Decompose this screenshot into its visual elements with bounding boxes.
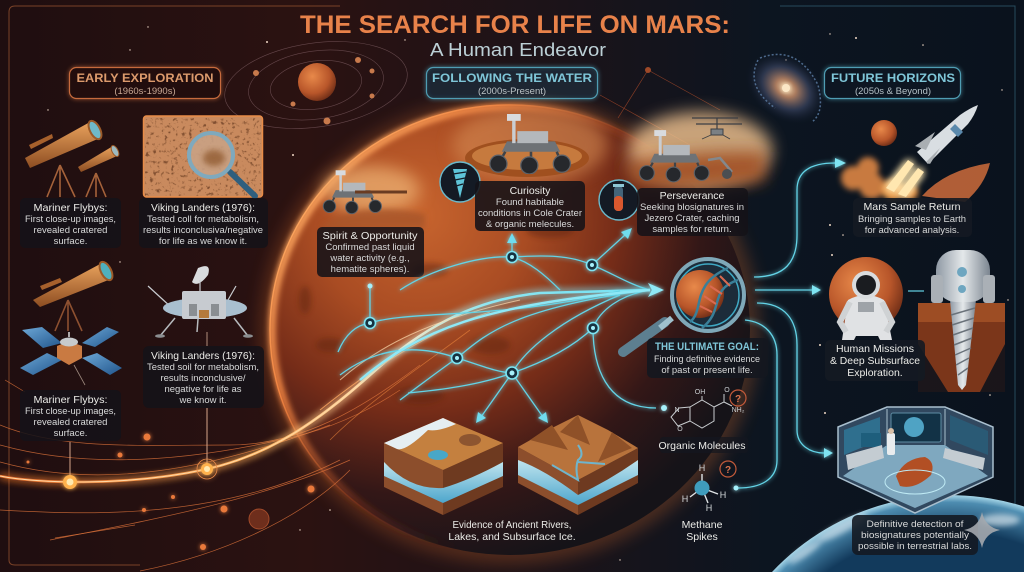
text: Mariner Flybys lower [20,390,121,441]
text: Perseverance: samples for return. [652,224,732,235]
heading: Following the Water: FOLLOWING THE WATER [432,73,593,85]
heading: Following the Water [426,68,598,98]
scene: Curiosity rover in crater [452,107,608,183]
timeline small glowing dots [26,434,314,550]
planet: large Mars [260,96,760,564]
icon: methane molecule: H [706,503,712,513]
text: Curiosity [475,181,585,231]
text: The Ultimate Goal: Finding definitive evidence [654,354,760,365]
heading: Following the Water: (2000s-Present) [478,86,546,97]
text: Mars Sample Return: Bringing samples to Earth [858,214,966,225]
icon: astronaut on Mars [829,257,903,340]
text: Curiosity: conditions in Cole Crater [478,208,582,219]
stem: lander to caption [206,332,208,346]
block: ice and lake terrain [384,418,503,515]
arrowhead: main [648,283,664,297]
text: Viking Landers top: for life as we know it. [159,236,247,247]
galaxy [732,37,840,139]
heading: Early Exploration: EARLY EXPLORATION [76,73,214,85]
text: Definitive detection: biosignatures potentially [861,530,969,541]
label: Evidence of ancient water: Evidence of Ancient Rivers, [452,519,572,531]
text: Viking Landers lower: Viking Landers (1976): [151,350,255,362]
heading: Future Horizons: FUTURE HORIZONS [831,73,955,85]
icon: sparkle [964,512,1000,548]
text: Perseverance: Seeking blosignatures in [640,202,744,213]
text: Definitive detection [852,515,978,555]
icon: magnifier with Mars and DNA [623,259,744,352]
icon: organic molecule diagram: N [674,407,680,414]
icon: organic molecule diagram: OH [695,389,705,396]
icon: question mark methane: ? [725,465,731,476]
block: river delta terrain [518,415,638,515]
text: Human Missions: & Deep Subsurface [830,355,920,367]
text: Mariner Flybys lower: surface. [54,428,87,439]
icon: methane molecule: H [699,463,705,473]
timeline: orbit lines and main orange stream [0,290,650,571]
icon: organic molecule diagram: NH₂ [732,407,745,414]
stem: Mariner to timeline [69,442,71,481]
label: Methane Spikes: Spikes [686,531,718,543]
network nodes [364,252,598,379]
icon: Mariner satellite [20,327,122,385]
text: Perseverance: Perseverance [660,190,725,202]
text: Perseverance [637,188,748,236]
label: Evidence of ancient water [448,519,576,543]
node: Mariner timeline [63,475,77,489]
icon: methane molecule: H [682,494,688,504]
decoration: small Mars with orbits [219,31,413,139]
heading: Future Horizons: (2050s & Beyond) [855,86,931,97]
decoration: distant node and lines [600,67,720,145]
icon: question mark organic [730,390,746,406]
label: Organic Molecules: Organic Molecules [659,440,745,452]
text: Mariner Flybys lower: revealed cratered [34,417,107,428]
text: Curiosity: Found habitable [496,197,564,208]
text: Spirit and Opportunity: water activity (e.g., [329,253,410,264]
network: cyan data streams [338,228,667,423]
text: Human Missions: Exploration. [847,367,903,379]
scene: Spirit and Opportunity rover [322,166,425,228]
text: Mariner Flybys lower: First close-up images, [25,406,116,417]
arrow: to Mars Sample Return [754,158,846,277]
text: Mars Sample Return: for advanced analysis. [865,225,959,236]
node: Viking timeline [197,459,217,479]
heading: Early Exploration: (1960s-1990s) [114,86,176,97]
icon: organic molecule diagram [671,387,745,433]
label: Methane Spikes: Methane [682,519,723,531]
icon: test tube badge [599,180,639,220]
title [300,11,730,60]
icon: question mark methane [720,461,736,477]
label: Evidence of ancient water: Lakes, and Subsurface Ice. [448,531,576,543]
icon: Earth [772,495,1024,572]
text: Human Missions [825,340,925,381]
icon: small red planet [249,509,269,529]
icon: small Mars future [871,120,897,146]
frame: left panel border [9,6,340,565]
text: Spirit and Opportunity [317,227,424,277]
arrow: to Human Missions [755,285,821,295]
icon: helicopter [692,118,742,139]
icon: methane molecule: H [720,490,726,500]
icon: drill bit badge [440,162,480,202]
text: Mariner Flybys top: Mariner Flybys: [34,202,108,214]
connector: methane link [734,320,777,490]
text: Viking Landers lower: we know it. [178,395,226,406]
text: Spirit and Opportunity: hematite spheres). [331,264,409,275]
text: Mariner Flybys top: First close-up images, [25,214,116,225]
subtitle: A Human Endeavor [430,39,606,60]
icon: deep drill rig [918,250,1005,392]
image: soil sample with magnifier [144,116,262,197]
stem: Viking to timeline [206,408,208,468]
icon: launch cloud [841,157,918,201]
icon: question mark organic: ? [735,394,741,405]
text: Viking Landers top [139,198,268,248]
text: Curiosity: Curiosity [510,185,551,197]
heading: Future Horizons [824,68,960,98]
arrow: to terrestrial labs [757,303,833,458]
icon: Viking lander [148,266,253,338]
text: Spirit and Opportunity: Spirit & Opportunity [322,230,418,242]
text: Mariner Flybys lower: Mariner Flybys: [34,394,108,406]
text: Mariner Flybys top [20,198,121,248]
text: Spirit and Opportunity: Confirmed past liquid [325,242,415,253]
text: Viking Landers lower: results inconclusive/ [160,373,246,384]
text: Mars Sample Return [853,198,972,237]
text: Viking Landers lower: negative for life as [164,384,242,395]
text: Mars Sample Return: Mars Sample Return [864,201,961,213]
icon: telescopes [25,119,120,197]
heading: Early Exploration [70,68,220,98]
label: Methane Spikes [682,519,723,543]
icon: organic molecule diagram: O [677,426,683,433]
icon: rocket [886,105,978,197]
arrowheads: branches [476,228,632,423]
text: Curiosity: & organic melecules. [486,219,574,230]
text: Viking Landers top: Tested coll for metabolism, [147,214,259,225]
text: The Ultimate Goal: of past or present life. [661,365,753,376]
text: Viking Landers top: results inconclusiva/negative [143,225,263,236]
text: The Ultimate Goal: THE ULTIMATE GOAL: [655,341,759,353]
icon: terrestrial laboratory [838,407,993,513]
text: Definitive detection: Definitive detection of [866,519,964,530]
icon: methane molecule [682,463,726,513]
text: Viking Landers top: Viking Landers (1976): [151,202,255,214]
text: Perseverance: Jezero Crater, caching [644,213,740,224]
icon: telescope lower [33,260,115,331]
text: Human Missions: Human Missions [836,343,914,355]
title: THE SEARCH FOR LIFE ON MARS: [300,11,730,39]
text: Viking Landers lower [143,346,264,408]
icon: organic molecule diagram: O [724,387,730,394]
text: Definitive detection: possible in terrestrial labs. [858,541,972,552]
scene: Perseverance rover and helicopter [625,112,772,188]
text: Mariner Flybys top: revealed cratered [34,225,107,236]
text: The Ultimate Goal [647,338,768,378]
text: Mariner Flybys top: surface. [54,236,87,247]
frame: right panel border [780,6,1015,562]
icon: planet horizon behind rocket [922,163,990,202]
text: Viking Landers lower: Tested soil for metabolism, [147,362,259,373]
connector: to drill [908,290,924,292]
